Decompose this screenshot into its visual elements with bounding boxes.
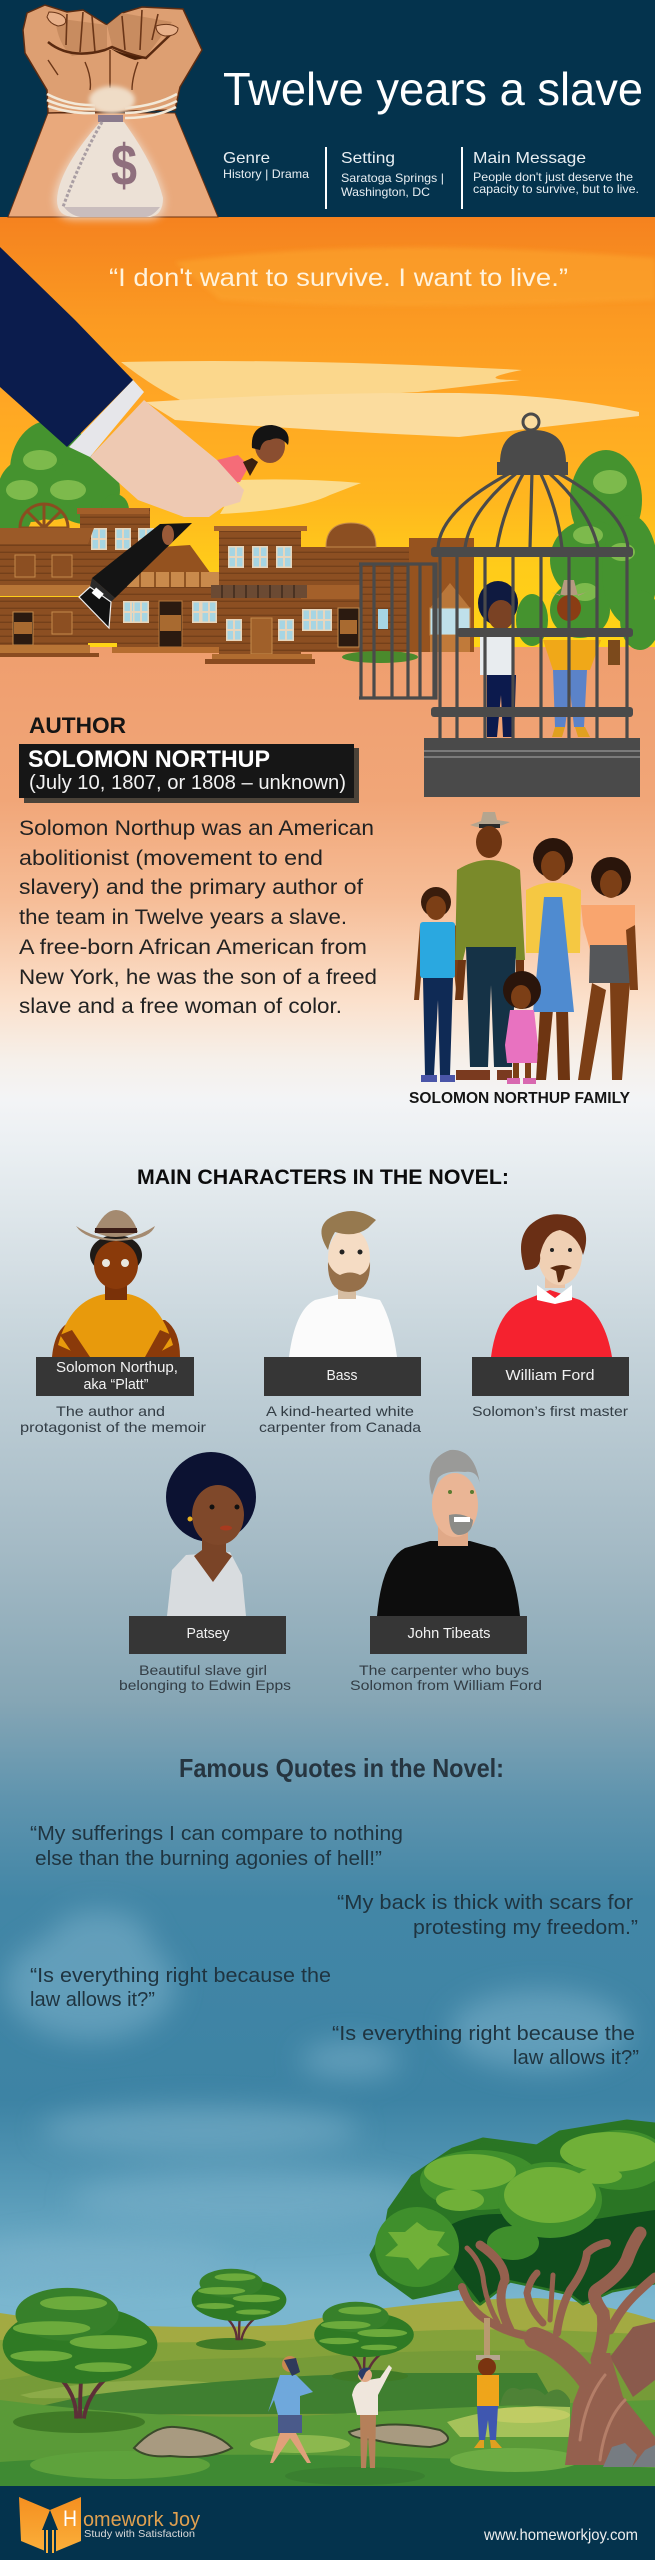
illustration: bound fists with money bag (8, 5, 218, 220)
author biography: slave and a free woman of color. (19, 995, 342, 1018)
small tree right (314, 2302, 414, 2382)
cage structure (359, 414, 628, 738)
large tree trunk (462, 2233, 655, 2465)
setting: Setting (341, 150, 395, 167)
author biography (19, 817, 377, 1018)
setting: Saratoga Springs | (341, 171, 444, 185)
quote: “I don't want to survive. I want to live.” (109, 264, 568, 292)
name label (472, 1357, 629, 1396)
author name box: SOLOMON NORTHUP (28, 746, 270, 773)
name label (264, 1357, 421, 1396)
figure: man pointing (352, 2365, 392, 2468)
panel: footer (0, 2486, 655, 2560)
wagon wheel (20, 504, 68, 552)
main message: Main Message (473, 150, 586, 167)
main message: capacity to survive, but to live. (473, 182, 639, 196)
bush (500, 2388, 570, 2407)
description (350, 1662, 542, 1693)
quote 4: law allows it?” (513, 2047, 639, 2069)
name label: aka “Platt” (84, 1377, 149, 1393)
figure head (217, 425, 289, 482)
portrait: John Tibeats (377, 1450, 520, 1616)
description: Solomon from William Ford (350, 1677, 542, 1693)
setting: Washington, DC (341, 185, 430, 199)
older daughter (578, 857, 638, 1080)
hills (0, 2298, 655, 2486)
sleeve (0, 247, 133, 447)
author biography: the team in Twelve years a slave. (19, 906, 347, 929)
family caption: SOLOMON NORTHUP FAMILY (409, 1090, 630, 1107)
quote 2: protesting my freedom.” (413, 1917, 638, 1939)
website: www.homeworkjoy.com (483, 2527, 638, 2544)
icon: money bag (54, 86, 165, 220)
quote 3 (30, 1965, 331, 2011)
hanging rope (484, 2318, 490, 2356)
cage base (424, 738, 640, 797)
description: carpenter from Canada (259, 1419, 421, 1435)
large tree canopy (372, 2122, 655, 2303)
quote 3: “Is everything right because the (30, 1965, 331, 1987)
name label: Bass (326, 1367, 358, 1384)
illustration: giant hand (0, 247, 289, 628)
panel: character Solomon Northup (20, 1210, 206, 1435)
figure: man in blue hoodie (268, 2356, 313, 2463)
portrait: William Ford (491, 1214, 612, 1357)
portrait: Bass (289, 1211, 397, 1357)
quote 4 (332, 2023, 639, 2069)
panel: character John Tibeats (350, 1450, 542, 1693)
boy (414, 887, 462, 1082)
sky clouds (0, 1910, 630, 2282)
description: A kind-hearted white (266, 1403, 414, 1419)
setting (341, 150, 444, 199)
name label: John Tibeats (408, 1625, 490, 1642)
cuff (69, 380, 144, 457)
description: Beautiful slave girl (139, 1662, 267, 1678)
author biography: New York, he was the son of a freed (19, 966, 377, 989)
panel: character William Ford (472, 1214, 629, 1419)
description: protagonist of the memoir (20, 1419, 206, 1435)
arms (8, 113, 218, 217)
genre: Genre (223, 150, 270, 167)
description: The author and (56, 1403, 165, 1419)
author biography: abolitionist (movement to end (19, 847, 323, 870)
building d (205, 526, 315, 664)
description: The carpenter who buys (359, 1662, 529, 1678)
man prisoner (543, 580, 601, 737)
description (259, 1403, 421, 1435)
illustration: Northup family (414, 812, 638, 1084)
description: belonging to Edwin Epps (119, 1677, 291, 1693)
panel: character Patsey (119, 1452, 291, 1693)
author biography: Solomon Northup was an American (19, 817, 374, 840)
brand name: H (63, 2506, 77, 2531)
building c (112, 545, 220, 653)
quote 2: “My back is thick with scars for (337, 1892, 633, 1914)
author name box (19, 744, 359, 803)
name label (129, 1616, 286, 1654)
panel: clouds (121, 247, 655, 514)
author biography: slavery) and the primary author of (19, 876, 363, 899)
quote 4: “Is everything right because the (332, 2023, 635, 2045)
description (20, 1403, 206, 1435)
illustration: wooden town (0, 504, 474, 664)
rocks by trunk (603, 2443, 655, 2467)
name label: Solomon Northup, (56, 1360, 178, 1376)
figure: hanged man (474, 2355, 502, 2448)
brand name: omework Joy (83, 2509, 200, 2531)
illustration: trees behind town (0, 420, 655, 665)
hand (90, 400, 244, 517)
icon: book logo (19, 2497, 81, 2553)
father (455, 812, 525, 1080)
quote 1: else than the burning agonies of hell!” (35, 1848, 382, 1870)
woman prisoner (478, 581, 518, 737)
title: Twelve years a slave (223, 63, 643, 115)
quote 3: law allows it?” (30, 1989, 155, 2011)
small tree middle (192, 2269, 286, 2350)
author name box: (July 10, 1807, or 1808 – unknown) (29, 772, 346, 794)
illustration: cage with prisoners (359, 414, 640, 797)
main message (473, 150, 639, 196)
rope (47, 94, 177, 118)
quote 2 (337, 1892, 638, 1939)
panel: header (0, 0, 655, 220)
name label (370, 1616, 527, 1654)
mother (526, 838, 581, 1080)
description (119, 1662, 291, 1693)
name label: Patsey (186, 1625, 230, 1642)
illustration: landscape with tree (0, 2122, 655, 2486)
brand name: Study with Satisfaction (84, 2528, 195, 2540)
building b (77, 508, 154, 643)
fingers (55, 18, 107, 56)
author biography: A free-born African American from (19, 936, 367, 959)
fists (23, 5, 202, 113)
heading: author: AUTHOR (29, 713, 126, 738)
panel: character Bass (259, 1211, 421, 1435)
name label (36, 1357, 194, 1396)
name label: William Ford (506, 1367, 594, 1384)
icon: money bag: $ (111, 133, 137, 198)
quote 1: “My sufferings I can compare to nothing (30, 1823, 403, 1845)
brand name (63, 2506, 200, 2540)
portrait: Solomon (52, 1210, 180, 1357)
genre (223, 150, 309, 181)
quote 1 (30, 1823, 403, 1870)
heading: famous quotes: Famous Quotes in the Novel: (179, 1753, 504, 1783)
small tree left (3, 2288, 157, 2433)
bush (342, 651, 418, 663)
heading: main characters: MAIN CHARACTERS IN THE NOVEL: (137, 1166, 509, 1189)
genre: History | Drama (223, 167, 309, 181)
building a (0, 528, 99, 657)
little girl (503, 971, 541, 1084)
main message: People don't just deserve the (473, 170, 633, 184)
building e (301, 523, 474, 652)
figure trousers (79, 523, 192, 628)
rocks (134, 2424, 448, 2457)
portrait: Patsey (166, 1452, 256, 1616)
description: Solomon’s first master (472, 1403, 628, 1419)
